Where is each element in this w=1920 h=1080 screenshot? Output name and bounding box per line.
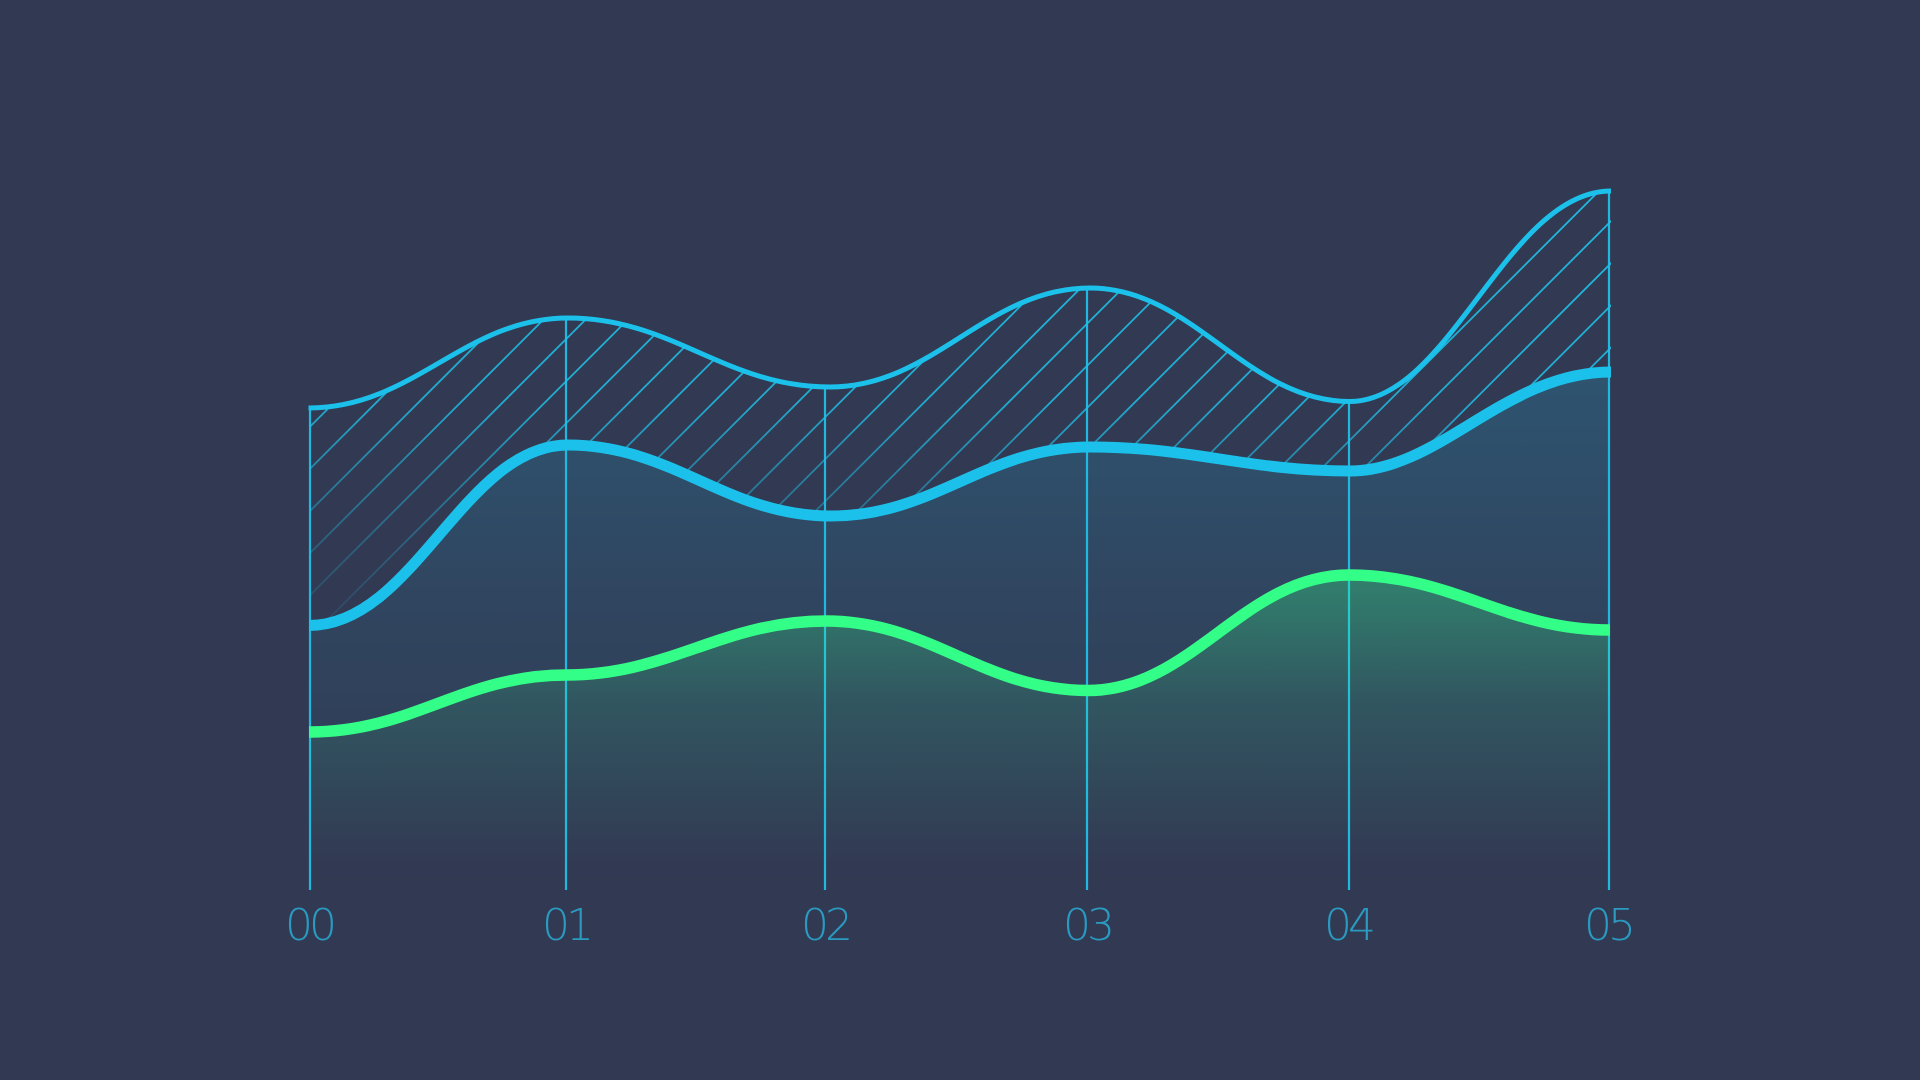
top blue line: [308, 191, 1611, 408]
x-axis labels: 04: [1324, 900, 1373, 951]
middle blue line: [309, 372, 1611, 626]
x-axis labels: 00: [285, 900, 333, 951]
vertical grid lines: [310, 191, 1609, 890]
x-axis labels: 01: [542, 900, 590, 951]
hatched band between top and middle curves: [311, 195, 1611, 618]
x-axis labels: 03: [1063, 900, 1111, 951]
blue area fill: [310, 372, 1610, 890]
x-axis labels: [285, 900, 1632, 951]
green area fill: [310, 575, 1610, 890]
x-axis labels: 05: [1584, 900, 1632, 951]
line chart infographic: [288, 188, 1632, 940]
x-axis labels: 02: [801, 900, 849, 951]
green line: [309, 575, 1610, 732]
